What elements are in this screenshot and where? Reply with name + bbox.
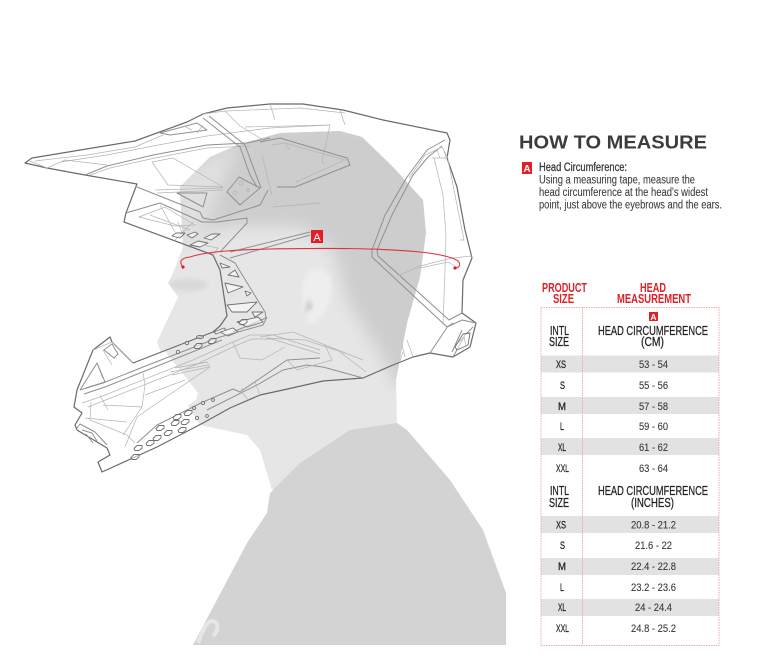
inches block: HEAD CIRCUMFERENCE	[598, 484, 708, 498]
size table	[541, 281, 719, 646]
visor screw plate	[227, 177, 260, 205]
centimetres block: 57 - 58	[639, 401, 668, 413]
table headers: PRODUCT	[542, 281, 587, 295]
centimetres block: M	[558, 401, 566, 413]
marker A column: A	[650, 312, 657, 322]
marker A: A	[313, 232, 321, 244]
temple wire lines	[230, 232, 310, 258]
table headers	[542, 281, 691, 306]
table headers: SIZE	[553, 292, 574, 306]
chin perforations	[131, 320, 247, 460]
centimetres block: 59 - 60	[639, 421, 668, 433]
white fill of chin bar	[74, 337, 198, 468]
inches block: XXL	[556, 623, 569, 635]
marker A column	[649, 312, 658, 322]
inches block: 22.4 - 22.8	[631, 561, 676, 573]
helmet line drawing	[25, 104, 476, 472]
visor details	[30, 104, 350, 207]
head and neck	[157, 131, 426, 490]
instruction text: point, just above the eyebrows and the ears.	[539, 200, 722, 212]
inches block: INTL	[550, 484, 569, 498]
measuring line A	[181, 230, 460, 270]
marker A legend: A	[523, 164, 531, 175]
inches block	[549, 484, 708, 635]
centimetres block: 55 - 56	[639, 380, 668, 392]
inches block: 24 - 24.4	[635, 602, 672, 614]
centimetres block: L	[560, 421, 564, 433]
marker A legend	[522, 162, 532, 175]
centimetres block: 61 - 62	[639, 442, 668, 454]
instruction text: Head Circumference:	[539, 162, 627, 174]
visor side vent	[152, 158, 223, 193]
inches block: 24.8 - 25.2	[631, 623, 676, 635]
centimetres block: 63 - 64	[639, 463, 668, 475]
centimetres block: XL	[558, 442, 566, 454]
helmet outline	[25, 104, 476, 472]
inches block: M	[558, 561, 566, 573]
inches block: L	[560, 582, 564, 594]
table headers: HEAD	[640, 281, 666, 295]
centimetres block	[549, 324, 708, 475]
peak vent	[126, 187, 268, 255]
inches block: (INCHES)	[631, 496, 674, 510]
centimetres block: INTL	[550, 324, 569, 338]
inches block: 20.8 - 21.2	[631, 520, 676, 532]
rear panel details	[372, 140, 476, 357]
inches block: SIZE	[549, 496, 569, 510]
centimetres block: SIZE	[549, 335, 569, 349]
centimetres block: 53 - 54	[639, 359, 668, 371]
inches block: 21.6 - 22	[635, 540, 672, 552]
upper vent slot	[260, 138, 350, 187]
ear	[302, 269, 332, 325]
marker A	[311, 230, 323, 244]
centimetres block: (CM)	[641, 335, 664, 349]
grey row bands	[541, 356, 719, 616]
centimetres block: XXL	[556, 463, 569, 475]
instruction text: Using a measuring tape, measure the	[539, 174, 695, 186]
instruction text	[522, 162, 722, 212]
shirt	[193, 423, 506, 645]
table headers: MEASUREMENT	[617, 292, 691, 306]
dotted table frame	[541, 308, 719, 646]
centimetres block: S	[560, 380, 565, 392]
inches block: 23.2 - 23.6	[631, 582, 676, 594]
red arc	[181, 248, 460, 268]
shirt logo	[198, 621, 217, 643]
chin bar details	[77, 317, 413, 460]
instruction text: head circumference at the head's widest	[539, 187, 709, 199]
heading: HOW TO MEASURE	[519, 132, 707, 152]
inches block: S	[560, 540, 565, 552]
centimetres block: HEAD CIRCUMFERENCE	[598, 324, 708, 338]
hair	[180, 131, 426, 384]
inches block: XS	[556, 520, 566, 532]
centimetres block: XS	[556, 359, 566, 371]
side strut with cut-outs	[220, 255, 266, 336]
inches block: XL	[558, 602, 566, 614]
person silhouette	[150, 120, 506, 645]
